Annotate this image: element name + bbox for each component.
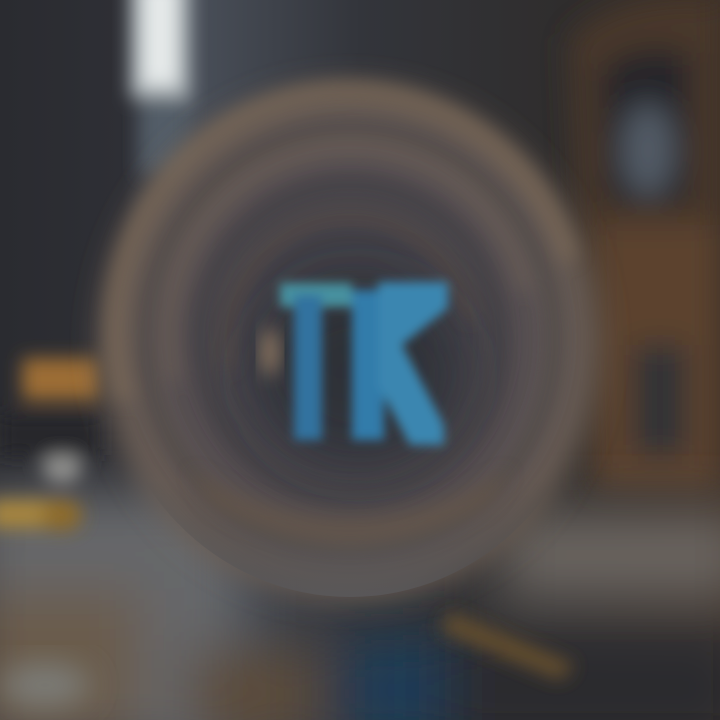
emblem left stem: [294, 295, 322, 440]
gold object left: [0, 358, 102, 531]
coin lower fade: [189, 530, 472, 597]
coin body: [100, 84, 600, 600]
floor: [0, 490, 720, 720]
floor highlight: [0, 663, 90, 707]
light streak: [130, 0, 190, 175]
warm accent beside emblem: [261, 328, 279, 376]
building at right: [570, 0, 720, 490]
emblem surround: [260, 285, 460, 465]
emblem top bars: [280, 283, 352, 307]
emblem right stem: [352, 290, 384, 440]
icon: blue emblem: [280, 282, 448, 445]
gold streak on floor: [440, 612, 575, 680]
emblem arm: [378, 282, 448, 445]
coin rings: [115, 91, 570, 550]
coin lower band: [190, 470, 510, 545]
coin disc: [100, 84, 600, 605]
